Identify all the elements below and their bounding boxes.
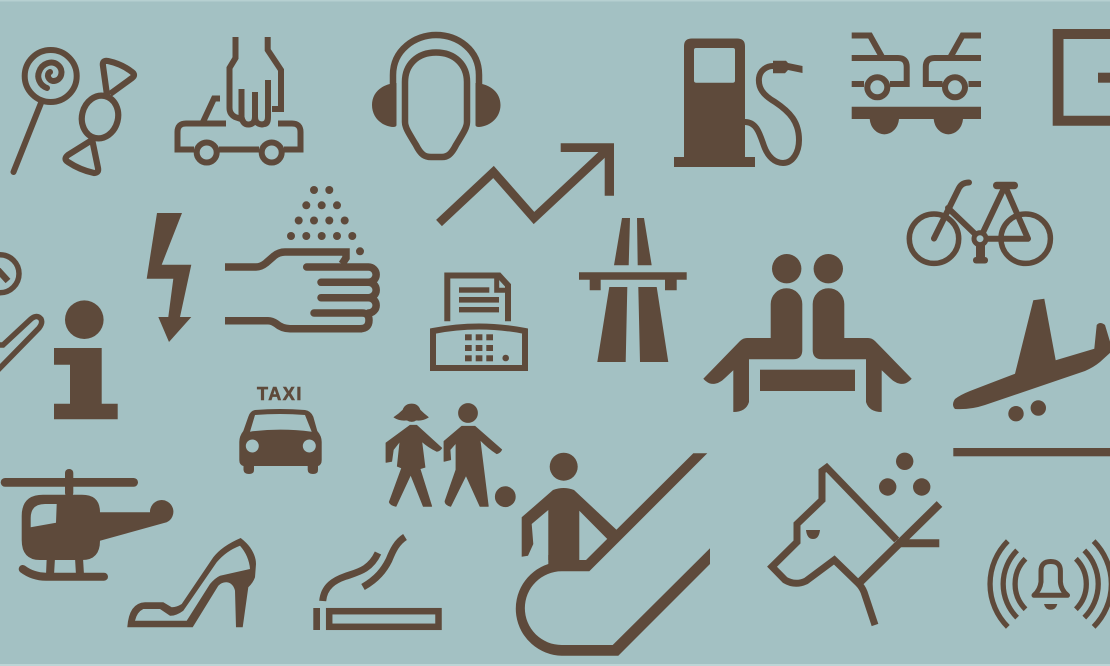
escalator: passenger <box>522 453 617 560</box>
car with hand: hand <box>230 37 281 125</box>
icon: bicycle <box>909 182 1050 264</box>
icon: partial square sign <box>1053 29 1110 126</box>
walkers: ball <box>495 487 515 507</box>
transporter: right car <box>926 36 981 97</box>
fax: machine body <box>433 326 525 368</box>
icon: no-sign fragment and pen at left edge <box>0 255 42 370</box>
icon: zigzag rising arrow <box>439 143 614 223</box>
icon: petrol pump <box>674 38 802 167</box>
car with hand: wheels <box>197 142 282 162</box>
alarm: sound waves <box>990 541 1110 627</box>
icon: wrapped candy <box>66 61 134 173</box>
cigarette: body <box>329 611 438 627</box>
headphones: band <box>393 35 479 85</box>
transporter: left car <box>852 36 907 97</box>
hand: powder dots <box>287 186 364 255</box>
seated: heads <box>772 254 843 283</box>
icon: lollipop <box>14 50 77 172</box>
taxi: label: TAXI <box>257 384 303 404</box>
icon: sniffing dog <box>772 453 940 625</box>
icon: taxi <box>239 384 322 474</box>
icon: helicopter <box>1 469 173 577</box>
icon: information i <box>54 300 118 419</box>
icon: person on escalator <box>516 453 710 656</box>
car with hand: windshield <box>203 98 220 122</box>
icon: headphones <box>372 35 500 157</box>
icon: two seated people on a bench <box>703 254 912 412</box>
dog: collar and leash <box>858 504 940 584</box>
fax: text lines <box>459 287 499 312</box>
walkers: woman <box>386 404 442 506</box>
bicycle: saddle <box>993 182 1018 189</box>
icon: hand on car <box>178 37 300 162</box>
transporter: platform and wheels <box>852 107 981 134</box>
icon: woman and child walking with ball <box>386 404 515 507</box>
icon: smoking cigarette <box>313 537 438 630</box>
alarm: bell <box>1034 562 1068 595</box>
pump: hose <box>745 66 799 163</box>
fax: keypad <box>465 334 509 361</box>
headphones: ear cups <box>372 83 500 127</box>
seated: right person <box>813 288 912 412</box>
icon: alarm bell <box>990 541 1110 627</box>
dog: eye <box>806 530 820 539</box>
car with hand: car body <box>178 124 300 150</box>
hand: outline and fingers <box>225 252 376 329</box>
bicycle: frame <box>934 182 1028 239</box>
icon: lightning bolt <box>147 213 191 342</box>
icon: high-heeled shoe <box>127 538 256 627</box>
walkers: man <box>444 404 502 506</box>
dog: head outline <box>772 468 897 625</box>
helicopter: skids <box>23 558 104 577</box>
icon: cars on transporter <box>852 36 981 134</box>
cigarette: smoke <box>323 537 405 601</box>
headphones: head outline <box>405 52 467 157</box>
icon: hand under falling powder <box>225 186 376 329</box>
seated: left person <box>703 288 802 412</box>
escalator: handrail <box>516 453 710 656</box>
helicopter: rotor and mast <box>1 469 138 497</box>
pump: body <box>674 38 755 167</box>
seated: bench <box>760 370 855 391</box>
bicycle: crank and stand <box>973 233 988 264</box>
fax: page fold <box>497 277 510 290</box>
bicycle: wheels <box>909 214 1050 263</box>
alarm: clapper <box>1044 604 1057 610</box>
pump: nozzle <box>773 61 802 73</box>
icon: landing aeroplane <box>953 299 1110 456</box>
dog: scent dots <box>879 453 930 496</box>
cigarette: filter <box>313 608 320 630</box>
helicopter: fuselage and tail <box>22 495 173 560</box>
fax: paper <box>447 276 508 321</box>
icon: fax machine <box>433 276 525 368</box>
icon: motorway bridge <box>579 218 687 362</box>
taxi: car front <box>239 409 322 474</box>
